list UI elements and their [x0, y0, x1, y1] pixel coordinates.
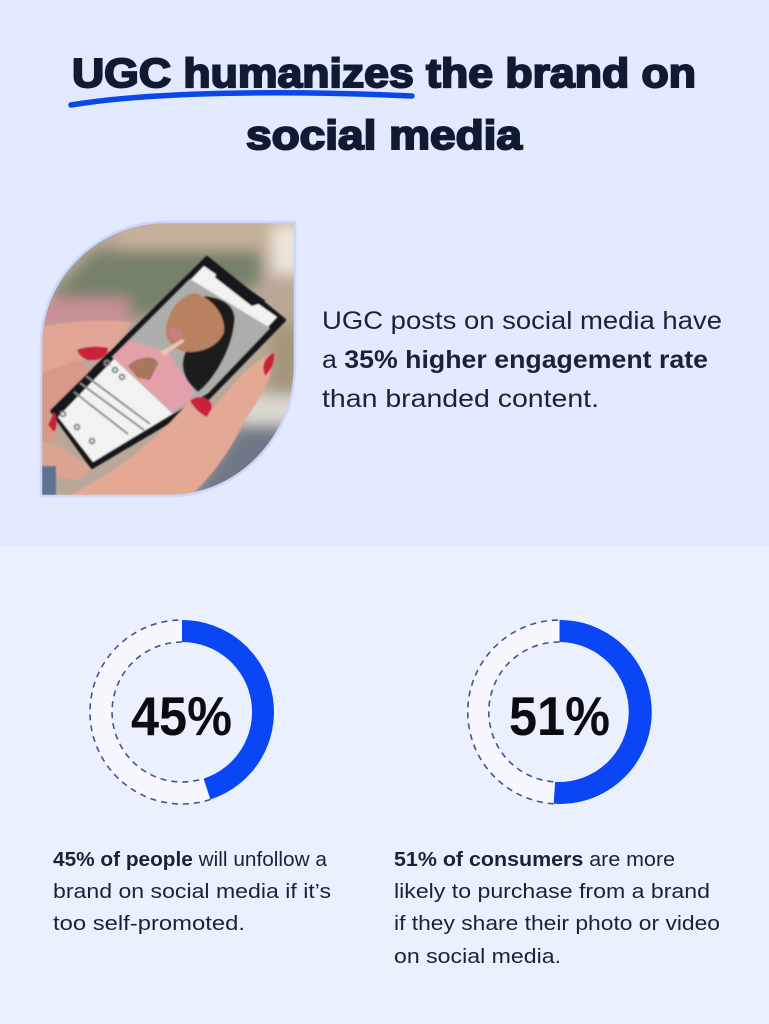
phone body: [52, 258, 284, 467]
text block: 51% caption: 51% of consumers are more: [394, 848, 675, 871]
woman's hand: [128, 358, 158, 380]
title: [72, 50, 696, 158]
woman's face: [166, 293, 224, 352]
sleeve: [42, 465, 57, 495]
text block: 45% caption: [53, 848, 331, 935]
title underline: [71, 93, 412, 105]
left middle finger: [42, 360, 92, 442]
panel: top section background: [0, 0, 769, 546]
text block: 51% caption: [394, 848, 720, 968]
text block: engagement rate: a 35% higher engagement rate: [322, 346, 708, 374]
text block: engagement rate: [322, 307, 722, 413]
woman's hair: [183, 296, 235, 392]
phone notch: [216, 270, 264, 305]
text block: 45% caption: brand on social media if it’s: [53, 880, 331, 903]
text block: engagement rate: UGC posts on social media have: [322, 307, 722, 335]
left top finger: [38, 320, 132, 376]
chart: 51% donut: [468, 620, 652, 804]
phone screen: [58, 266, 277, 462]
photo on screen: [112, 279, 270, 414]
chart: 45% donut: [90, 620, 274, 804]
text block: 45% caption: too self-promoted.: [53, 912, 245, 935]
text block: 51% caption: on social media.: [394, 945, 561, 968]
text block: 51% caption: if they share their photo or video: [394, 912, 720, 935]
title: social media: [246, 112, 523, 158]
panel: bottom section background: [0, 546, 769, 1024]
title: UGC humanizes the brand on: [72, 50, 696, 96]
lip gloss wand: [160, 339, 185, 356]
red fingernails: [48, 347, 274, 432]
right hand: [66, 353, 271, 497]
woman's shirt: [112, 340, 194, 412]
chart: 45% donut: 45%: [131, 685, 232, 747]
infographic canvas: [40, 56, 721, 963]
woman's mouth: [168, 328, 183, 341]
chart: 51% donut: 51%: [509, 685, 610, 747]
left lower finger: [38, 442, 90, 480]
caption text lines: [61, 361, 150, 443]
photo: hands holding a phone: [35, 212, 305, 500]
text block: 51% caption: likely to purchase from a brand: [394, 880, 710, 903]
text block: engagement rate: than branded content.: [322, 385, 599, 413]
text block: 45% caption: 45% of people will unfollow a: [53, 848, 328, 871]
